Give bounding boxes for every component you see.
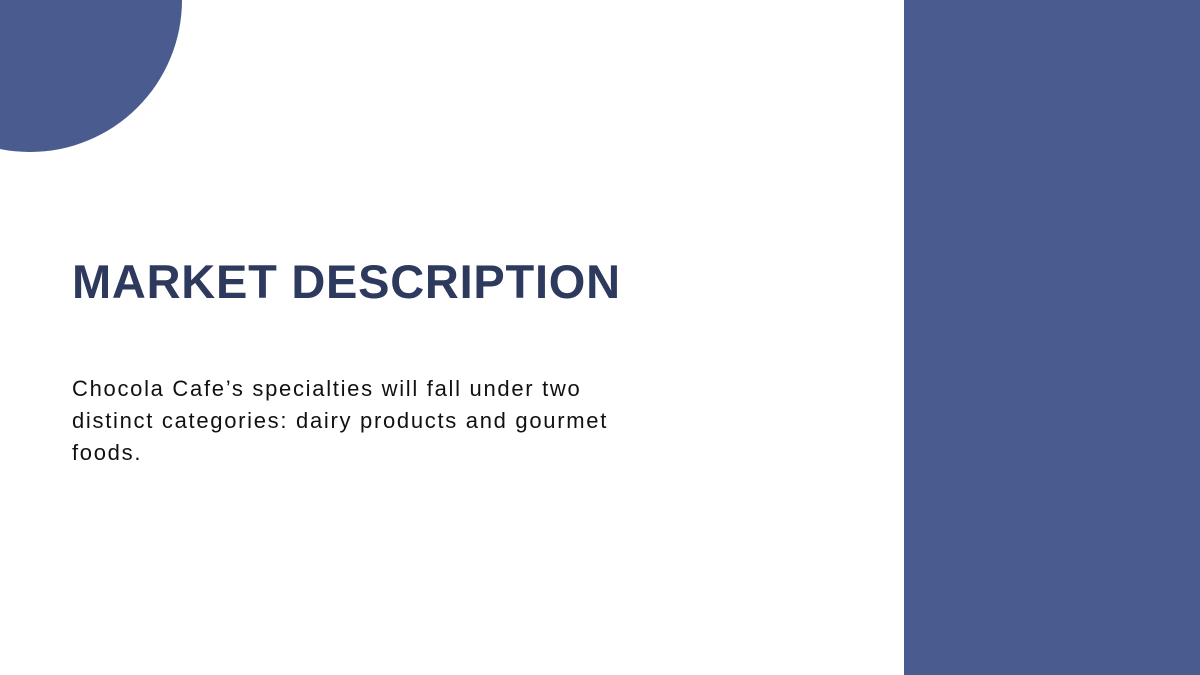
panel: right blue block: [904, 0, 1200, 675]
text block: description: Chocola Cafe’s specialties will fall under two: [72, 376, 581, 401]
decorative circle top-left: [0, 0, 182, 152]
text block: description: [72, 376, 608, 465]
text block: description: distinct categories: dairy products and gourmet: [72, 408, 608, 433]
title: MARKET DESCRIPTION: [72, 255, 621, 308]
text block: description: foods.: [72, 440, 142, 465]
